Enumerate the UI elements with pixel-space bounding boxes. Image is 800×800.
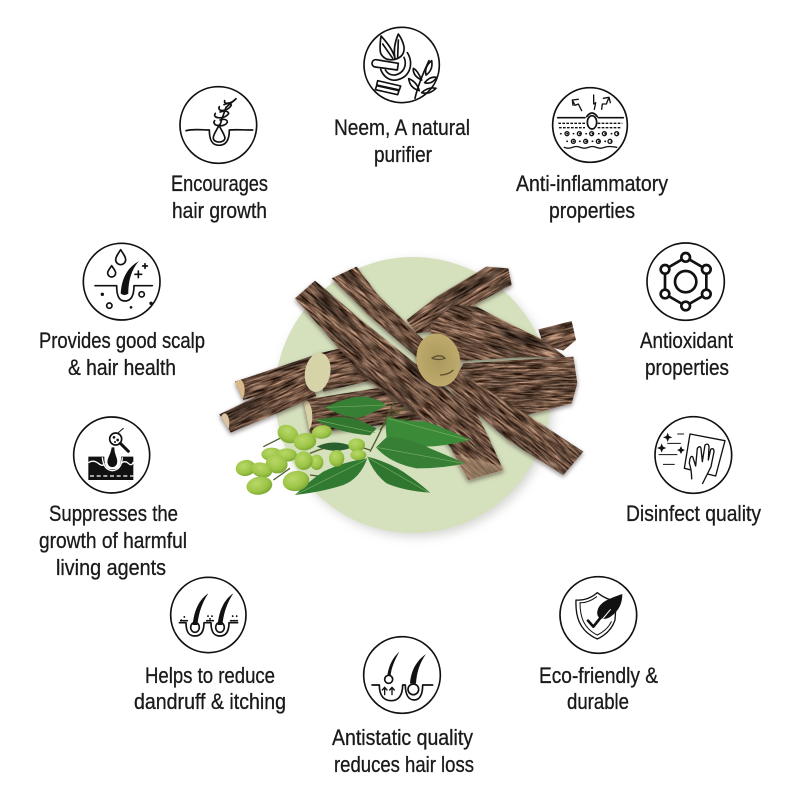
label: Eco-friendly & durable [539,663,658,714]
label: Antioxidant properties: Antioxidant [640,328,733,353]
label: Encourages hair growth: Encourages [171,171,268,196]
label: Encourages hair growth [171,171,268,223]
leaves [317,442,353,451]
label: Provides good scalp & hair health: Provides good scalp [39,328,205,353]
label: Suppresses the growth of harmful living agents [39,501,187,580]
icon: magnifier over skin cross-section [74,417,150,493]
icon: shield with leaf and check [560,577,637,653]
green backdrop circle [275,257,554,537]
icon: molecule [647,243,724,320]
label: Eco-friendly & durable: Eco-friendly & [539,663,658,688]
label: Anti-inflammatory properties: properties [549,198,635,223]
label: Antistatic quality reduces hair loss: Antistatic quality [332,725,473,750]
label: Eco-friendly & durable: durable [567,689,629,714]
panel: Suppresses the growth of harmful living agents [39,417,187,580]
label: Suppresses the growth of harmful living agents: Suppresses the [49,501,178,526]
label: Neem, A natural purifier [334,115,470,167]
icon: hair growing from follicle [180,87,257,163]
label: Encourages hair growth: hair growth [172,198,267,223]
label: Provides good scalp & hair health [39,328,205,380]
panel: Encourages hair growth [171,87,268,223]
panel: Antioxidant properties [640,243,733,380]
panel: Helps to reduce dandruff and itching [134,577,286,714]
label: Antistatic quality reduces hair loss: reduces hair loss [334,752,474,777]
panel: Eco-friendly and durable [539,577,658,714]
icon: hand wiping with cloth [655,417,732,493]
label: Helps to reduce dandruff & itching: dandruff & itching [134,689,286,714]
label: Antioxidant properties: properties [645,355,729,380]
neem sticks and leaves [198,181,626,515]
icon: hair, droplets and sparkles [83,243,160,320]
label: Suppresses the growth of harmful living agents: growth of harmful [39,528,187,553]
label: Antioxidant properties [640,328,733,380]
label: Helps to reduce dandruff & itching: Helps to reduce [145,663,275,688]
stems [263,400,410,480]
icon: mortar, leaves and branch [364,27,439,103]
label: Provides good scalp & hair health: & hair health [68,355,176,380]
label: Neem, A natural purifier: purifier [374,142,432,167]
label: Neem, A natural purifier: Neem, A natural [334,115,470,140]
berries [234,421,366,497]
panel: Provides good scalp and hair health [39,243,205,380]
panel: Anti-inflammatory properties [516,88,668,223]
icon: skin layers with arrows [553,88,627,162]
panel: Neem, a natural purifier [334,27,470,167]
icon: two hair follicles with flakes [171,577,246,653]
icon: hair follicles with up arrows [364,637,440,713]
panel: Disinfect quality [626,417,761,526]
label: Anti-inflammatory properties [516,171,668,223]
label: Disinfect quality: Disinfect quality [626,501,761,526]
label: Suppresses the growth of harmful living agents: living agents [56,555,166,580]
label: Helps to reduce dandruff & itching [134,663,286,714]
label: Anti-inflammatory properties: Anti-inflammatory [516,171,668,196]
panel: central illustration [218,257,585,541]
label: Antistatic quality reduces hair loss [332,725,474,777]
panel: Antistatic quality reduces hair loss [332,637,474,777]
